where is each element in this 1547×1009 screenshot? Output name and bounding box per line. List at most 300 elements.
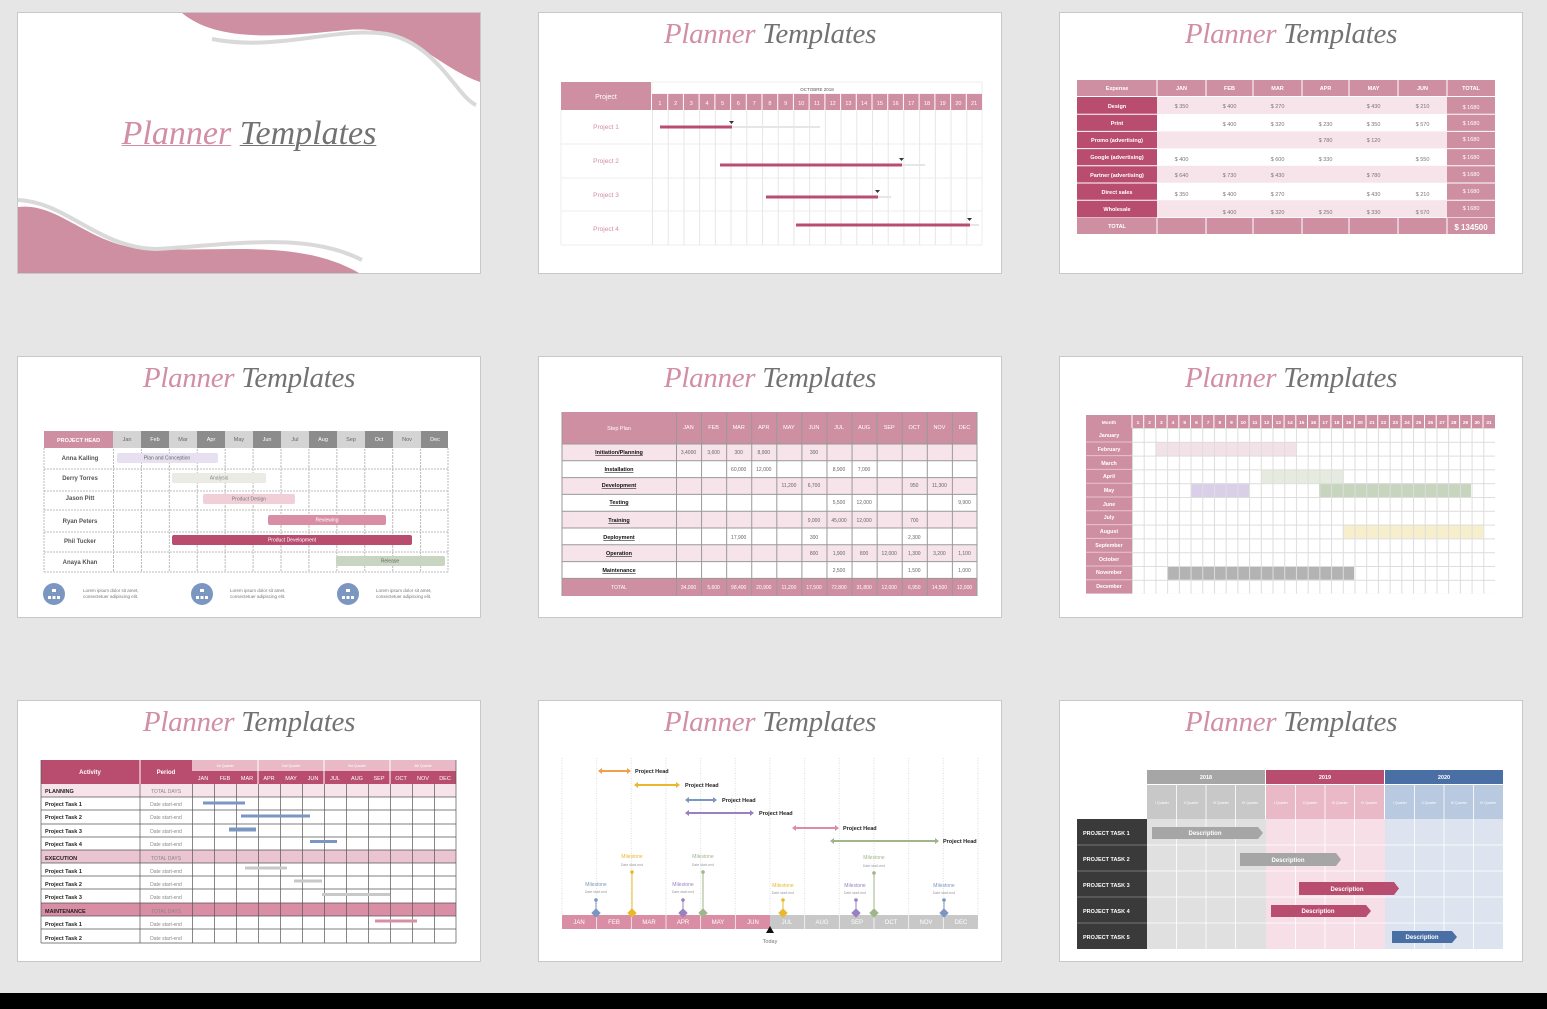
header: Jan bbox=[123, 437, 131, 443]
wave: top right bbox=[182, 13, 480, 105]
header row: 12 bbox=[1264, 420, 1270, 426]
names: Ryan Peters bbox=[63, 519, 98, 525]
month bar: JUL bbox=[782, 920, 793, 926]
values: 1,100 bbox=[958, 551, 971, 557]
project labels bbox=[593, 124, 619, 233]
body rows: $ 210 bbox=[1416, 104, 1429, 110]
header: DEC bbox=[439, 776, 451, 782]
total row bbox=[562, 578, 977, 596]
header row: 2 bbox=[1148, 420, 1151, 426]
month column: January bbox=[1099, 433, 1119, 439]
project labels: Project 4 bbox=[593, 226, 619, 233]
milestones: Milestone bbox=[863, 855, 885, 861]
today marker bbox=[763, 926, 778, 945]
header bbox=[41, 760, 456, 784]
values: 60,000 bbox=[731, 467, 747, 473]
header: 11 bbox=[814, 101, 820, 107]
activity labels: Project Task 2 bbox=[45, 936, 82, 942]
month column: August bbox=[1100, 529, 1118, 535]
milestones: Date start-end bbox=[621, 863, 643, 867]
body rows: $ 350 bbox=[1175, 104, 1188, 110]
header row: 15 bbox=[1299, 420, 1305, 426]
header: DEC bbox=[959, 425, 970, 431]
task labels: PROJECT TASK 5 bbox=[1083, 935, 1130, 941]
title: Planner Templates bbox=[143, 362, 355, 394]
header: 1st Quarter bbox=[216, 764, 235, 768]
total row: 34,000 bbox=[681, 585, 696, 591]
header row: 29 bbox=[1463, 420, 1468, 426]
slide 7: activity quarterly table: TOTAL DAYS bbox=[151, 789, 182, 795]
header: 7 bbox=[753, 101, 756, 107]
slide 7: activity quarterly table: Date start-end bbox=[150, 829, 182, 835]
month column bbox=[1086, 428, 1132, 594]
activity labels: Project Task 1 bbox=[45, 922, 82, 928]
header: 3rd Quarter bbox=[348, 764, 367, 768]
header row: 7 bbox=[1207, 420, 1210, 426]
values: 12,000 bbox=[756, 467, 772, 473]
slide 7: activity quarterly table: Date start-end bbox=[150, 936, 182, 942]
project head arrows: Project Head bbox=[685, 783, 719, 789]
footer icons and text: consectetuer adipiscing elit. bbox=[230, 594, 285, 599]
slide 7: activity quarterly table: Date start-end bbox=[150, 842, 182, 848]
header row: MAR bbox=[1271, 86, 1284, 92]
values: 6,700 bbox=[808, 483, 820, 489]
task bars: Analysis bbox=[210, 476, 229, 482]
step labels: Installation bbox=[604, 467, 634, 473]
footer icons and text bbox=[43, 583, 432, 605]
header: JAN bbox=[198, 776, 208, 782]
header: Mar bbox=[178, 437, 188, 443]
values: 9,900 bbox=[958, 500, 971, 506]
quarter row: II Quarter bbox=[1184, 801, 1199, 805]
header: NOV bbox=[933, 425, 946, 431]
body rows: $ 400 bbox=[1175, 157, 1188, 163]
header: Project bbox=[595, 94, 617, 101]
quarter row: IV Quarter bbox=[1480, 801, 1497, 805]
section rows bbox=[41, 784, 456, 916]
values: 9,000 bbox=[808, 518, 820, 524]
body rows: $ 400 bbox=[1223, 104, 1236, 110]
slide 4: project head gantt bbox=[17, 356, 481, 618]
header row: 26 bbox=[1428, 420, 1433, 426]
month column: December bbox=[1096, 584, 1122, 590]
values: 2,500 bbox=[833, 568, 845, 574]
task labels: PROJECT TASK 4 bbox=[1083, 909, 1131, 915]
header: JUL bbox=[330, 776, 340, 782]
title: Planner Templates bbox=[664, 362, 876, 394]
body rows: $ 120 bbox=[1367, 138, 1380, 144]
milestones: Milestone bbox=[672, 882, 694, 888]
body rows: Direct sales bbox=[1102, 190, 1132, 196]
header: SEP bbox=[373, 776, 385, 782]
month column: April bbox=[1103, 474, 1116, 480]
milestones: Date start-end bbox=[672, 890, 694, 894]
header row: 20 bbox=[1358, 420, 1363, 426]
header row: 19 bbox=[1346, 420, 1351, 426]
header row: 23 bbox=[1393, 420, 1398, 426]
header: JAN bbox=[683, 425, 694, 431]
milestones: Date start-end bbox=[863, 864, 885, 868]
total row: 12,000 bbox=[882, 585, 897, 591]
values: 700 bbox=[910, 518, 919, 524]
header: PROJECT HEAD bbox=[57, 438, 100, 444]
header: 12 bbox=[830, 101, 836, 107]
header: APR bbox=[758, 425, 769, 431]
values: 12,000 bbox=[856, 518, 872, 524]
header row: 13 bbox=[1276, 420, 1281, 426]
header: 5 bbox=[721, 101, 724, 107]
month bar: JAN bbox=[573, 920, 585, 926]
header: Activity bbox=[79, 770, 101, 776]
header: Apr bbox=[207, 437, 215, 443]
body rows: Promo (advertising) bbox=[1091, 138, 1143, 144]
month column: May bbox=[1104, 488, 1114, 494]
description arrows: Description bbox=[1330, 887, 1364, 893]
total row: 17,500 bbox=[806, 585, 822, 591]
project head arrows bbox=[598, 768, 977, 845]
footer icons and text: Lorem ipsum dolor sit amet, bbox=[376, 588, 432, 593]
header: 16 bbox=[893, 101, 899, 107]
slide 7: activity quarterly table: Date start-end bbox=[150, 869, 182, 875]
values: 11,300 bbox=[932, 483, 947, 489]
task labels: PROJECT TASK 1 bbox=[1083, 831, 1130, 837]
activity labels: Project Task 4 bbox=[45, 842, 83, 848]
task bars: Product Design bbox=[232, 496, 266, 502]
header row: Month bbox=[1102, 420, 1116, 426]
slide 7: activity quarterly table: Date start-end bbox=[150, 802, 182, 808]
header row: 11 bbox=[1252, 420, 1258, 426]
activity labels: Project Task 2 bbox=[45, 882, 82, 888]
header bbox=[562, 412, 977, 444]
project head arrows: Project Head bbox=[722, 798, 756, 804]
names: Anna Kalling bbox=[62, 456, 99, 462]
values: 45,000 bbox=[831, 518, 847, 524]
values: 8,900 bbox=[833, 467, 845, 473]
project head arrows: Project Head bbox=[943, 839, 977, 845]
quarter row: I Quarter bbox=[1274, 801, 1289, 805]
total row: $ 134500 bbox=[1454, 223, 1488, 232]
header row: 1 bbox=[1137, 420, 1140, 426]
slide 7: activity quarterly table: TOTAL DAYS bbox=[151, 909, 182, 915]
description arrows: Description bbox=[1405, 935, 1439, 941]
total row: 72,800 bbox=[831, 585, 847, 591]
header row: 18 bbox=[1334, 420, 1340, 426]
values: 17,900 bbox=[731, 535, 747, 541]
values: 950 bbox=[910, 483, 919, 489]
slide 1: cover bbox=[17, 12, 481, 274]
values: 1,000 bbox=[958, 568, 971, 574]
header: OCT bbox=[395, 776, 407, 782]
body rows: $ 570 bbox=[1416, 210, 1429, 216]
header: 14 bbox=[861, 101, 867, 107]
header row bbox=[1086, 415, 1495, 428]
title: Planner Templates bbox=[143, 706, 355, 738]
milestones: Date start-end bbox=[933, 891, 955, 895]
body rows: $ 400 bbox=[1223, 122, 1236, 128]
header row bbox=[1077, 80, 1495, 234]
header row: MAY bbox=[1368, 86, 1380, 92]
header row: APR bbox=[1320, 86, 1331, 92]
month column: March bbox=[1101, 461, 1117, 467]
header: Feb bbox=[150, 437, 160, 443]
quarter row: IV Quarter bbox=[1242, 801, 1259, 805]
header row: 3 bbox=[1160, 420, 1163, 426]
task labels: PROJECT TASK 2 bbox=[1083, 857, 1130, 863]
header: APR bbox=[263, 776, 275, 782]
header: 17 bbox=[908, 101, 914, 107]
slide 8: milestone timeline bbox=[538, 700, 1002, 962]
task bars: Release bbox=[381, 558, 399, 564]
names bbox=[62, 456, 99, 566]
milestones: Milestone bbox=[844, 883, 866, 889]
month column: June bbox=[1103, 502, 1115, 508]
header: AUG bbox=[858, 425, 870, 431]
footer icons and text: Lorem ipsum dolor sit amet, bbox=[83, 588, 139, 593]
project labels: Project 3 bbox=[593, 192, 619, 199]
activity labels bbox=[45, 789, 86, 942]
quarter row: II Quarter bbox=[1422, 801, 1437, 805]
project head arrows: Project Head bbox=[759, 811, 793, 817]
month column: September bbox=[1095, 543, 1123, 549]
total row: 11,200 bbox=[781, 585, 797, 591]
total row: 5,600 bbox=[707, 585, 720, 591]
month bar: MAY bbox=[712, 920, 724, 926]
month bar: MAR bbox=[642, 920, 656, 926]
header: Oct bbox=[375, 437, 384, 443]
header: 15 bbox=[877, 101, 883, 107]
slide 2: project gantt bbox=[538, 12, 1002, 274]
body rows: Wholesale bbox=[1103, 207, 1131, 213]
footer icons and text: Lorem ipsum dolor sit amet, bbox=[230, 588, 286, 593]
month bar: OCT bbox=[885, 920, 898, 926]
body rows: $ 250 bbox=[1319, 210, 1332, 216]
header row: 5 bbox=[1183, 420, 1186, 426]
body rows: $ 1680 bbox=[1463, 137, 1479, 143]
today marker: Today bbox=[763, 939, 778, 945]
milestones: Milestone bbox=[772, 883, 794, 889]
header: Sep bbox=[346, 437, 356, 443]
title: Planner Templates bbox=[1185, 362, 1397, 394]
bars bbox=[660, 121, 979, 226]
header: May bbox=[234, 437, 244, 443]
header: Jun bbox=[263, 437, 271, 443]
activity labels: EXECUTION bbox=[45, 856, 77, 862]
header: 9 bbox=[784, 101, 787, 107]
names: Derry Torres bbox=[62, 476, 98, 482]
total row: 98,400 bbox=[731, 585, 747, 591]
title: Planner Templates bbox=[664, 706, 876, 738]
month bar: AUG bbox=[815, 920, 829, 926]
body rows: $ 780 bbox=[1319, 138, 1332, 144]
values: 800 bbox=[810, 551, 818, 557]
slide 7: activity quarterly table bbox=[17, 700, 481, 962]
footer icons and text: consectetuer adipiscing elit. bbox=[83, 594, 138, 599]
values: 3,600 bbox=[707, 450, 720, 456]
activity labels: Project Task 1 bbox=[45, 802, 82, 808]
header row: JUN bbox=[1417, 86, 1428, 92]
description arrows: Description bbox=[1188, 831, 1222, 837]
body rows: $ 400 bbox=[1223, 210, 1236, 216]
header: JUL bbox=[834, 425, 844, 431]
description arrows: Description bbox=[1301, 909, 1335, 915]
slide 6: monthly day calendar bbox=[1059, 356, 1523, 618]
description arrows: Description bbox=[1271, 858, 1305, 864]
month column: October bbox=[1099, 557, 1119, 563]
body rows: $ 1680 bbox=[1463, 189, 1479, 195]
quarter row: I Quarter bbox=[1393, 801, 1408, 805]
header: OCT bbox=[908, 425, 921, 431]
header: MAR bbox=[733, 425, 745, 431]
year headers: 2019 bbox=[1319, 775, 1331, 781]
bottom black bar bbox=[0, 993, 1547, 1009]
total row: TOTAL bbox=[611, 585, 627, 591]
body rows: $ 730 bbox=[1223, 173, 1236, 179]
month column: July bbox=[1104, 515, 1114, 521]
milestones: Date start-end bbox=[692, 863, 714, 867]
header row: TOTAL bbox=[1462, 86, 1481, 92]
body rows: $ 350 bbox=[1175, 192, 1188, 198]
milestones: Milestone bbox=[621, 854, 643, 860]
milestones: Date start-end bbox=[844, 891, 866, 895]
header row: 22 bbox=[1381, 420, 1387, 426]
header row: 6 bbox=[1195, 420, 1198, 426]
header: 10 bbox=[798, 101, 804, 107]
step labels: Initiation/Planning bbox=[595, 450, 643, 456]
header row: 31 bbox=[1486, 420, 1492, 426]
milestones: Milestone bbox=[585, 882, 607, 888]
total row: 12,000 bbox=[957, 585, 972, 591]
description arrows bbox=[1152, 827, 1457, 943]
header: Aug bbox=[318, 437, 328, 443]
footer icons and text: consectetuer adipiscing elit. bbox=[376, 594, 431, 599]
task labels bbox=[1077, 819, 1147, 949]
body rows: $ 1680 bbox=[1463, 105, 1479, 111]
slide 3: expense table bbox=[1059, 12, 1523, 274]
slide 5: step plan table bbox=[538, 356, 1002, 618]
total row bbox=[1077, 218, 1495, 234]
milestones bbox=[585, 854, 955, 917]
slide 7: activity quarterly table: Date start-end bbox=[150, 895, 182, 901]
activity labels: MAINTENANCE bbox=[45, 909, 86, 915]
header: Jul bbox=[291, 437, 299, 443]
header bbox=[44, 431, 448, 448]
body rows: $ 430 bbox=[1367, 104, 1380, 110]
values: 5,500 bbox=[833, 500, 845, 506]
title: Planner Templates bbox=[664, 18, 876, 50]
header row: 8 bbox=[1218, 420, 1221, 426]
body rows: $ 230 bbox=[1319, 122, 1332, 128]
title: Planner Templates bbox=[1185, 18, 1397, 50]
quarter row bbox=[1147, 785, 1503, 819]
header: 4th Quarter bbox=[414, 764, 433, 768]
milestones: Milestone bbox=[692, 854, 714, 860]
milestones: Milestone bbox=[933, 883, 955, 889]
total row: 6,950 bbox=[908, 585, 921, 591]
header: 20 bbox=[955, 101, 961, 107]
month bar: NOV bbox=[919, 920, 933, 926]
values: 8,900 bbox=[758, 450, 770, 456]
body rows: $ 550 bbox=[1416, 157, 1429, 163]
slide 7: activity quarterly table: Date start-end bbox=[150, 882, 182, 888]
header: 1 bbox=[658, 101, 661, 107]
task labels: PROJECT TASK 3 bbox=[1083, 883, 1130, 889]
values: 11,200 bbox=[781, 483, 797, 489]
header row: FEB bbox=[1224, 86, 1235, 92]
year headers: 2018 bbox=[1200, 775, 1212, 781]
total row: TOTAL bbox=[1108, 224, 1127, 230]
activity labels: Project Task 3 bbox=[45, 829, 82, 835]
slide 9: multi-year roadmap bbox=[1059, 700, 1523, 962]
month bar: JUN bbox=[747, 920, 759, 926]
body rows: $ 780 bbox=[1367, 173, 1380, 179]
header row: 16 bbox=[1311, 420, 1316, 426]
task bars: Reviewing bbox=[315, 518, 339, 524]
header row: 21 bbox=[1369, 420, 1375, 426]
body rows: Design bbox=[1108, 104, 1127, 110]
month bar: DEC bbox=[955, 920, 968, 926]
header bbox=[561, 82, 982, 110]
activity labels: Project Task 3 bbox=[45, 895, 82, 901]
body rows: $ 330 bbox=[1319, 157, 1332, 163]
values: 2,300 bbox=[908, 535, 921, 541]
body rows: $ 210 bbox=[1416, 192, 1429, 198]
values: 800 bbox=[860, 551, 868, 557]
body rows: $ 350 bbox=[1367, 122, 1380, 128]
body rows: $ 270 bbox=[1271, 104, 1284, 110]
header: Period bbox=[157, 770, 176, 776]
header: SEP bbox=[884, 425, 895, 431]
header row: 24 bbox=[1404, 420, 1410, 426]
header: 3 bbox=[690, 101, 693, 107]
month column: February bbox=[1098, 447, 1120, 453]
header row: 27 bbox=[1439, 420, 1445, 426]
body rows bbox=[1077, 97, 1495, 217]
values: 12,000 bbox=[856, 500, 872, 506]
quarter row: III Quarter bbox=[1213, 801, 1230, 805]
quarter row: IV Quarter bbox=[1361, 801, 1378, 805]
body rows: $ 430 bbox=[1271, 173, 1284, 179]
header: 2 bbox=[674, 101, 677, 107]
body rows: $ 430 bbox=[1367, 192, 1380, 198]
body rows: $ 1680 bbox=[1463, 172, 1479, 178]
header: 19 bbox=[940, 101, 946, 107]
body rows: $ 570 bbox=[1416, 122, 1429, 128]
quarter row: III Quarter bbox=[1451, 801, 1468, 805]
quarter row: II Quarter bbox=[1303, 801, 1318, 805]
title: Planner Templates bbox=[1185, 706, 1397, 738]
body rows: Partner (advertising) bbox=[1090, 173, 1144, 179]
month bar: FEB bbox=[608, 920, 620, 926]
body rows: $ 320 bbox=[1271, 210, 1284, 216]
milestones: Date start-end bbox=[585, 890, 607, 894]
month bar: APR bbox=[677, 920, 690, 926]
project head arrows: Project Head bbox=[635, 769, 669, 775]
header: OCTOBRE 2018 bbox=[800, 87, 834, 92]
values: 3,200 bbox=[933, 551, 946, 557]
header: 2nd Quarter bbox=[282, 764, 301, 768]
body rows: $ 1680 bbox=[1463, 206, 1479, 212]
body rows: $ 1680 bbox=[1463, 121, 1479, 127]
step labels: Maintenance bbox=[602, 568, 636, 574]
header: 4 bbox=[705, 101, 709, 107]
values: 1,500 bbox=[908, 568, 921, 574]
header: MAY bbox=[783, 425, 795, 431]
header: Nov bbox=[402, 437, 412, 443]
body bbox=[1147, 785, 1503, 949]
values bbox=[681, 450, 971, 574]
activity labels: Project Task 2 bbox=[45, 815, 82, 821]
task bars: Plan and Conception bbox=[144, 456, 190, 462]
